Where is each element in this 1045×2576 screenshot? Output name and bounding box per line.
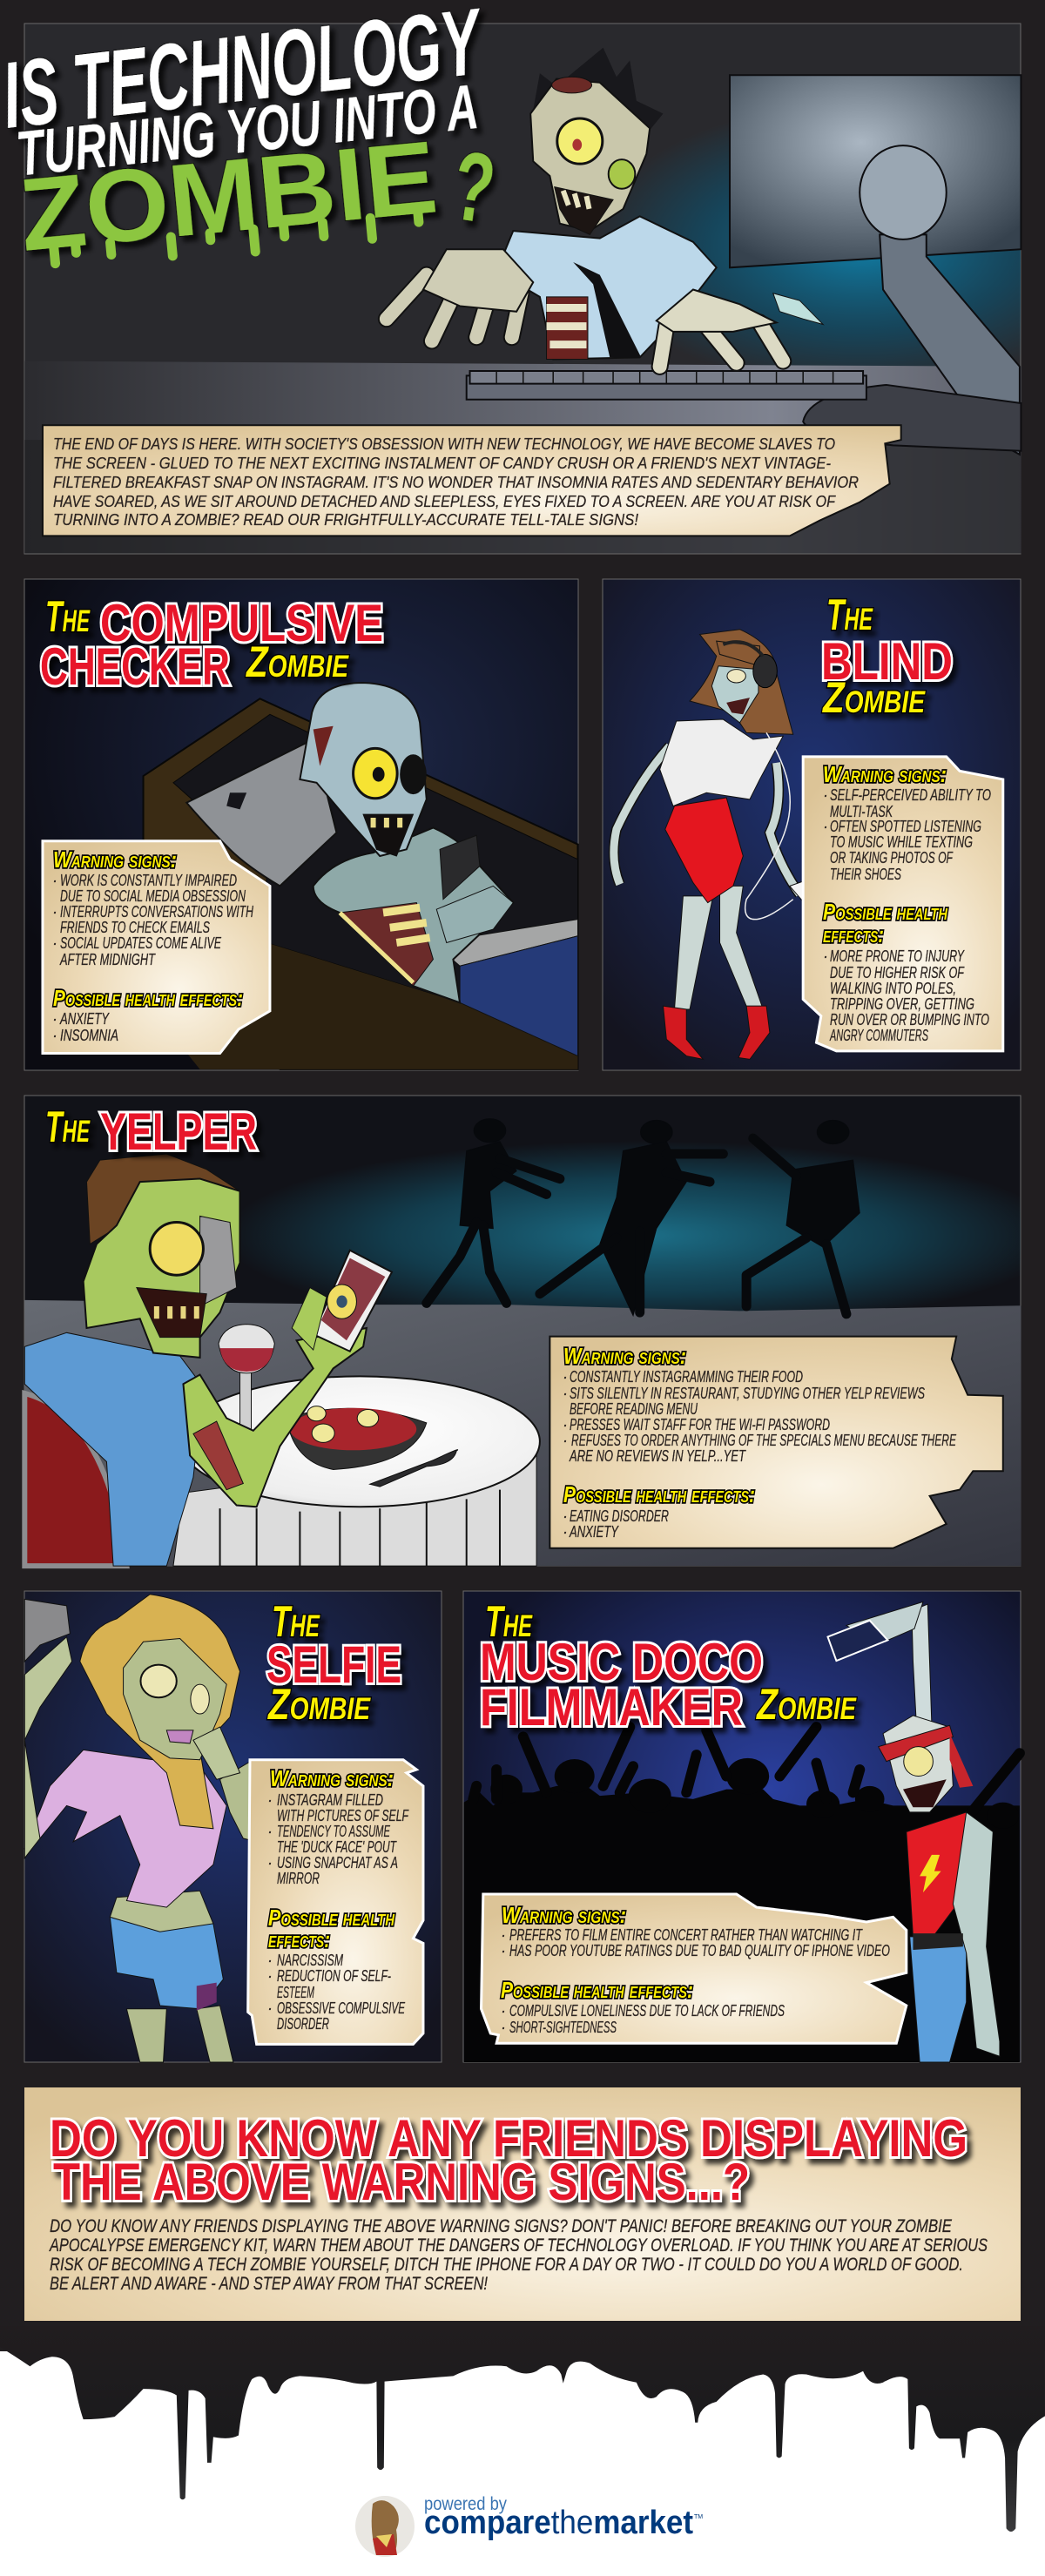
callout: yelper warning signs: Warning signs: [563,1343,686,1369]
illustration: concert crowd [464,1727,1020,2062]
callout: compulsive warning signs: · [52,1027,57,1044]
heading: the selfie zombie: SELFIE [266,1635,401,1694]
callout: compulsive warning signs [43,841,270,1054]
logo: compare the market: TM [694,2514,703,2520]
callout: compulsive warning signs: Warning signs: [53,846,177,873]
panel: intro [0,0,1021,554]
callout: compulsive warning signs: WORK IS CONSTANTLY IMPAIRED [60,872,237,889]
title: ZOMBIE [15,119,442,273]
heading: the compulsive checker zombie: Zombie [245,637,349,686]
callout: filmmaker warning signs: Possible health effects: [501,1977,693,2003]
heading: the blind zombie: BLIND [821,632,953,691]
callout: selfie warning signs: INSTAGRAM FILLED [277,1791,383,1809]
callout: blind warning signs: · [823,818,828,835]
heading: the compulsive checker zombie: COMPULSIVE [100,594,383,652]
callout: blind warning signs [803,757,1003,1051]
illustration: office zombie [387,48,823,367]
heading: the music doco filmmaker zombie [480,1597,857,1736]
heading: the selfie zombie [266,1597,401,1729]
callout: filmmaker warning signs: HAS POOR YOUTUBE RATINGS DUE TO BAD QUALITY OF IPHONE VIDEO [509,1942,890,1959]
callout: yelper warning signs: · [563,1523,568,1541]
callout: compulsive warning signs: ANXIETY [59,1010,110,1028]
callout: blind warning signs: · [823,947,828,965]
callout: selfie warning signs: Possible health [268,1905,395,1931]
heading: the yelper: The [45,1103,91,1151]
callout: selfie warning signs: MIRROR [277,1870,320,1887]
callout: selfie warning signs: DISORDER [277,2015,329,2033]
callout: blind warning signs: DUE TO HIGHER RISK OF [830,964,965,981]
callout: blind warning signs: · [823,786,828,804]
title: TURNING YOU INTO A [13,72,482,190]
panel: closing call to action [24,2087,1021,2321]
callout: yelper warning signs: ARE NO REVIEWS IN YELP...YET [569,1447,746,1465]
icon: meerkat badge [355,2496,415,2557]
callout: yelper warning signs: ANXIETY [569,1523,619,1541]
panel: selfie zombie [24,1591,442,2062]
heading: the music doco filmmaker zombie: MUSIC DOCO [480,1633,763,1691]
panel: blind zombie [603,579,1021,1070]
heading: the selfie zombie: The [272,1597,320,1646]
callout: filmmaker warning signs: COMPULSIVE LONELINESS DUE TO LACK OF FRIENDS [509,2002,785,2020]
callout: selfie warning signs: · [267,1967,273,1985]
callout: blind warning signs: MORE PRONE TO INJURY [830,947,965,965]
text block: closing paragraph: BE ALERT AND AWARE - AND STEP AWAY FROM THAT SCREEN! [50,2274,488,2294]
title [0,0,502,273]
heading: the blind zombie: Zombie [821,673,926,722]
callout: yelper warning signs: · [563,1385,568,1402]
left hand [387,275,521,341]
callout: filmmaker warning signs: · [501,2019,506,2036]
callout: selfie warning signs: · [267,1999,273,2017]
callout: blind warning signs: TRIPPING OVER, GETTING [830,995,974,1013]
illustration: yelper zombie at table [24,1154,540,1566]
black paint drips [0,2326,1045,2532]
callout: filmmaker warning signs: · [501,1942,506,1959]
heading: the yelper [45,1103,257,1161]
callout: selfie warning signs: · [267,1823,273,1840]
callout: selfie warning signs [248,1760,423,2044]
callout: selfie warning signs: effects: [268,1926,330,1952]
callout: compulsive warning signs: DUE TO SOCIAL MEDIA OBSESSION [60,887,246,905]
heading: the music doco filmmaker zombie: FILMMAKER [480,1678,743,1736]
callout: intro paper: FILTERED BREAKFAST SNAP ON INSTAGRAM. IT'S NO WONDER THAT INSOMNIA RATES AND SEDENTARY BEHAVIOR [53,474,859,491]
callout: yelper warning signs: PRESSES WAIT STAFF FOR THE WI-FI PASSWORD [570,1416,830,1433]
callout: compulsive warning signs: · [52,903,57,920]
callout: blind warning signs: ANGRY COMMUTERS [829,1027,928,1044]
logo: compare the market [355,2494,703,2557]
callout: blind warning signs: MULTI-TASK [830,803,893,820]
panel: music doco filmmaker zombie [463,1591,1021,2062]
heading: the compulsive checker zombie: The [45,592,91,641]
panel: the yelper [24,1096,1021,1566]
callout: selfie warning signs: · [267,1854,273,1871]
callout: blind warning signs: TO MUSIC WHILE TEXTING [830,833,973,851]
callout: selfie warning signs: Warning signs: [270,1765,394,1791]
heading: the selfie zombie: Zombie [266,1680,371,1729]
callout: compulsive warning signs: FRIENDS TO CHECK EMAILS [60,919,210,936]
callout: filmmaker warning signs: · [501,1926,506,1944]
callout: yelper warning signs: EATING DISORDER [570,1507,669,1525]
heading: the blind zombie: The [826,590,873,639]
callout: compulsive warning signs: SOCIAL UPDATES COME ALIVE [60,934,222,952]
callout: filmmaker warning signs: PREFERS TO FILM ENTIRE CONCERT RATHER THAN WATCHING IT [509,1926,863,1944]
callout: compulsive warning signs: AFTER MIDNIGHT [59,951,156,968]
callout: selfie warning signs: TENDENCY TO ASSUME [277,1823,391,1840]
callout: compulsive warning signs: Possible health effects: [53,985,243,1011]
callout: blind warning signs: Possible health [823,899,948,925]
heading: do you know any friends [50,2109,967,2211]
callout: blind warning signs: OFTEN SPOTTED LISTENING [830,818,981,835]
logo: compare the market: comparethemarket [424,2505,693,2541]
callout: yelper warning signs: · [563,1368,568,1386]
callout: compulsive warning signs: INTERRUPTS CONVERSATIONS WITH [60,903,254,920]
callout: yelper warning signs: BEFORE READING MENU [570,1400,698,1418]
callout: blind warning signs: THEIR SHOES [830,866,901,883]
callout: yelper warning signs: · [563,1507,568,1525]
callout: intro paper: THE SCREEN - GLUED TO THE NEXT EXCITING INSTALMENT OF CANDY CRUSH OR A FRIEND'S NEXT VINTAGE- [53,455,831,472]
callout: yelper warning signs [549,1337,1003,1548]
callout: compulsive warning signs: · [52,872,57,889]
heading: the music doco filmmaker zombie: The [485,1597,533,1646]
callout: selfie warning signs: REDUCTION OF SELF- [277,1967,391,1985]
callout: blind warning signs: OR TAKING PHOTOS OF [830,849,954,867]
callout: blind warning signs: effects: [823,921,884,947]
illustration: selfie zombie woman [24,1595,263,2062]
callout: yelper warning signs: Possible health effects: [563,1481,755,1507]
heading: the blind zombie [821,590,953,722]
callout: compulsive warning signs: INSOMNIA [60,1027,118,1044]
text block: closing paragraph [48,2216,988,2294]
callout: filmmaker warning signs [482,1894,907,2043]
callout: selfie warning signs: · [267,1952,273,1969]
illustration: silhouettes [24,1119,1021,1566]
callout: selfie warning signs: WITH PICTURES OF SELF [277,1807,409,1824]
heading: do you know any friends: THE ABOVE WARNING SIGNS...? [53,2153,750,2211]
callout: blind warning signs: Warning signs: [823,761,947,787]
logo: compare the market: powered by [424,2494,507,2514]
heading: the compulsive checker zombie: CHECKER [40,637,230,696]
illustration: coffin zombie [144,683,578,1069]
panel: compulsive checker zombie [24,579,578,1070]
illustration: filmmaker zombie [828,1602,1000,2062]
callout: yelper warning signs: CONSTANTLY INSTAGRAMMING THEIR FOOD [570,1368,803,1386]
callout: selfie warning signs: OBSESSIVE COMPULSIVE [277,1999,406,2017]
callout: selfie warning signs: ESTEEM [277,1984,314,2001]
callout: selfie warning signs: THE 'DUCK FACE' POUT [277,1838,397,1856]
illustration: blind zombie woman [614,630,833,1059]
callout: filmmaker warning signs: SHORT-SIGHTEDNESS [509,2019,617,2036]
callout: blind warning signs: WALKING INTO POLES, [830,980,956,997]
heading: the compulsive checker zombie [40,592,383,696]
callout: selfie warning signs: USING SNAPCHAT AS A [277,1854,398,1871]
heading: the yelper: YELPER [100,1103,257,1161]
callout: selfie warning signs: · [267,1791,273,1809]
title: ? [447,131,502,244]
callout: filmmaker warning signs: Warning signs: [502,1902,626,1928]
callout: compulsive warning signs: · [52,1010,57,1028]
callout: intro paper: HAVE SOARED, AS WE SIT AROUND DETACHED AND SLEEPLESS, EYES FIXED TO A SCREEN. ARE YOU AT RISK OF [53,493,836,510]
callout: selfie warning signs: NARCISSISM [277,1952,343,1969]
callout: yelper warning signs: · [563,1432,568,1449]
callout: filmmaker warning signs: · [501,2002,506,2020]
callout: yelper warning signs: · [563,1416,568,1433]
callout: intro paper: THE END OF DAYS IS HERE. WITH SOCIETY'S OBSESSION WITH NEW TECHNOLOGY, WE HAVE BECOME SLAVES TO [53,435,835,453]
right hand [660,322,783,367]
callout: intro paper [43,425,901,536]
heading: the music doco filmmaker zombie: Zombie [755,1680,857,1729]
callout: compulsive warning signs: · [52,934,57,952]
callout: intro paper: TURNING INTO A ZOMBIE? READ OUR FRIGHTFULLY-ACCURATE TELL-TALE SIGNS! [53,511,638,529]
